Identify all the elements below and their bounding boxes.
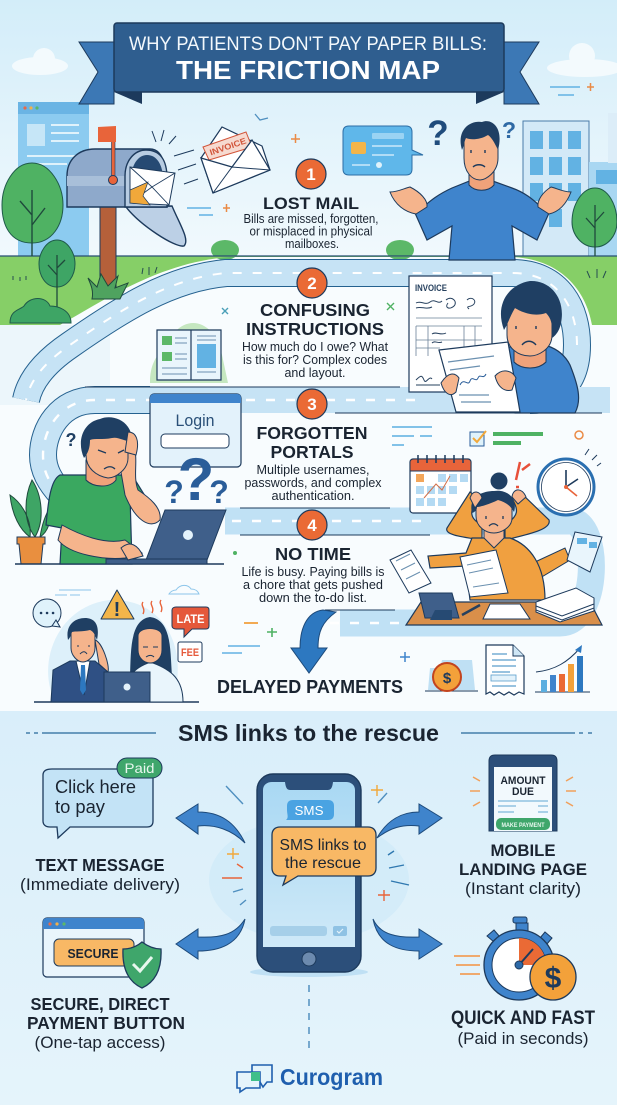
road: top leg, upper-left and right curve [26, 273, 577, 400]
card: text message: Paid [124, 760, 154, 776]
people: stressed couple with late fee: ! [114, 599, 120, 621]
card: mobile landing page: (Instant clarity) [465, 879, 581, 898]
step 4: no time [233, 510, 385, 605]
arrow: up left [176, 804, 245, 843]
icon: open guide book [150, 323, 228, 383]
people: stressed couple with late fee: LATE [176, 612, 204, 626]
road: third leg [43, 387, 610, 495]
card: secure payment button [27, 918, 185, 1052]
icon: coin and money: $ [443, 670, 452, 687]
step 3: forgotten portals: passwords, and complex [244, 475, 382, 490]
step 1: lost mail: mailboxes. [285, 237, 339, 251]
step 1: lost mail: 1 [306, 165, 316, 184]
step 2: confusing instructions: INSTRUCTIONS [246, 319, 384, 339]
logo: Curogram [237, 1064, 383, 1092]
trees and bushes [2, 163, 617, 323]
people: stressed couple with late fee: FEE [181, 647, 199, 659]
icon: flying invoice envelope [152, 127, 270, 193]
person: confused man in blue sweater: ? [427, 114, 449, 153]
decorative: marks near arrow [222, 623, 410, 662]
panel: SMS rescue background [0, 711, 617, 1105]
icon: wall clock [538, 449, 601, 515]
road: fourth leg and final curve [225, 508, 591, 623]
card: text message [20, 758, 180, 894]
icon: login window [150, 394, 241, 467]
step 3: forgotten portals: 3 [307, 395, 317, 414]
step 2: confusing instructions: 2 [307, 274, 317, 293]
step 1: lost mail [244, 159, 378, 251]
card: secure payment button: SECURE, DIRECT [30, 994, 170, 1014]
person: confused man in blue sweater [390, 114, 571, 260]
icon: credit card speech bubble [343, 126, 423, 175]
step 4: no time: Life is busy. Paying bills is [242, 564, 385, 579]
step 4: no time: NO TIME [275, 544, 351, 564]
person: man with confusing invoice: INVOICE [415, 283, 447, 293]
step 4: no time: down the to-do list. [259, 590, 367, 605]
card: quick and fast: QUICK AND FAST [451, 1007, 595, 1029]
card: mobile landing page: DUE [512, 786, 534, 798]
icon: mailbox with flag [67, 126, 186, 299]
icon: question marks: ? [209, 474, 229, 510]
person: confused man in blue sweater: ? [502, 117, 516, 143]
card: quick and fast: (Paid in seconds) [458, 1029, 588, 1048]
card: secure payment button: PAYMENT BUTTON [27, 1013, 185, 1033]
step 3: forgotten portals: PORTALS [270, 442, 354, 462]
step 3: forgotten portals: Multiple usernames, [256, 462, 370, 477]
card: secure payment button: (One-tap access) [34, 1033, 166, 1052]
icon: calendar [410, 455, 471, 513]
icon: question marks [66, 430, 229, 513]
card: text message: (Immediate delivery) [20, 875, 180, 894]
arrow: down left [176, 919, 245, 959]
step 2: confusing instructions: CONFUSING [260, 300, 370, 320]
person: man with confusing invoice [409, 276, 579, 413]
card: quick and fast: $ [545, 962, 562, 995]
step 3: forgotten portals: authentication. [272, 488, 354, 503]
title banner [79, 23, 539, 104]
icon: central phone: SMS [294, 803, 324, 818]
card: quick and fast [451, 917, 595, 1048]
arrow: down right [373, 919, 442, 959]
card: text message: Click here [55, 777, 136, 797]
icon: potted plant [10, 480, 51, 564]
step 1: lost mail: or misplaced in physical [250, 224, 372, 238]
title banner: WHY PATIENTS DON'T PAY PAPER BILLS: [129, 33, 487, 55]
background: sky and map [0, 0, 617, 711]
connector: dashed line [308, 985, 310, 1050]
person: overwhelmed woman at desk [390, 462, 602, 625]
step 2: confusing instructions [222, 268, 394, 380]
card: mobile landing page: MOBILE [490, 841, 556, 860]
step 3: forgotten portals: FORGOTTEN [256, 423, 368, 443]
icon: question marks: ? [66, 430, 76, 450]
icon: question marks: ? [178, 446, 214, 513]
icon: central phone: the rescue [285, 855, 361, 872]
logo: Curogram: Curogram [280, 1064, 383, 1090]
scenery: city buildings [18, 102, 617, 256]
step 2: confusing instructions: How much do I owe? What [242, 339, 388, 354]
grass [0, 256, 617, 325]
people: stressed couple with late fee [33, 585, 209, 702]
card: mobile landing page: MAKE PAYMENT [502, 823, 545, 829]
card: mobile landing page [459, 755, 587, 898]
card: secure payment button: SECURE [68, 946, 119, 961]
icon: flying invoice envelope: INVOICE [208, 135, 248, 157]
heading: delayed payments: DELAYED PAYMENTS [217, 676, 403, 697]
decorative: sparkle marks [222, 785, 409, 905]
icon: bill document [486, 645, 524, 695]
card: mobile landing page: LANDING PAGE [459, 860, 587, 879]
step 1: lost mail: LOST MAIL [263, 194, 359, 213]
card: mobile landing page: AMOUNT [500, 775, 546, 787]
heading: SMS links to the rescue: SMS links to the rescue [178, 720, 439, 746]
arrow: up right [377, 804, 442, 838]
person: frustrated man at laptop [15, 417, 226, 564]
icon: question marks: ? [164, 474, 184, 510]
step 3: forgotten portals [244, 389, 382, 503]
arrow: to delayed payments [291, 610, 336, 673]
card: text message: to pay [55, 797, 105, 817]
icon: central phone [250, 774, 376, 977]
chart: rising bars [535, 645, 590, 692]
icon: coin and money [425, 660, 478, 691]
step 4: no time: a chore that gets pushed [243, 577, 383, 592]
step 2: confusing instructions: is this for? Complex codes [243, 352, 387, 367]
icon: central phone: SMS links to [280, 837, 367, 854]
title banner: THE FRICTION MAP [176, 55, 440, 85]
decorative: checklist marks [392, 427, 583, 446]
step 2: confusing instructions: and layout. [284, 365, 346, 380]
step 1: lost mail: Bills are missed, forgotten, [244, 212, 378, 226]
icon: login window: Login [176, 411, 214, 430]
card: text message: TEXT MESSAGE [36, 855, 164, 875]
step 4: no time: 4 [307, 516, 317, 535]
